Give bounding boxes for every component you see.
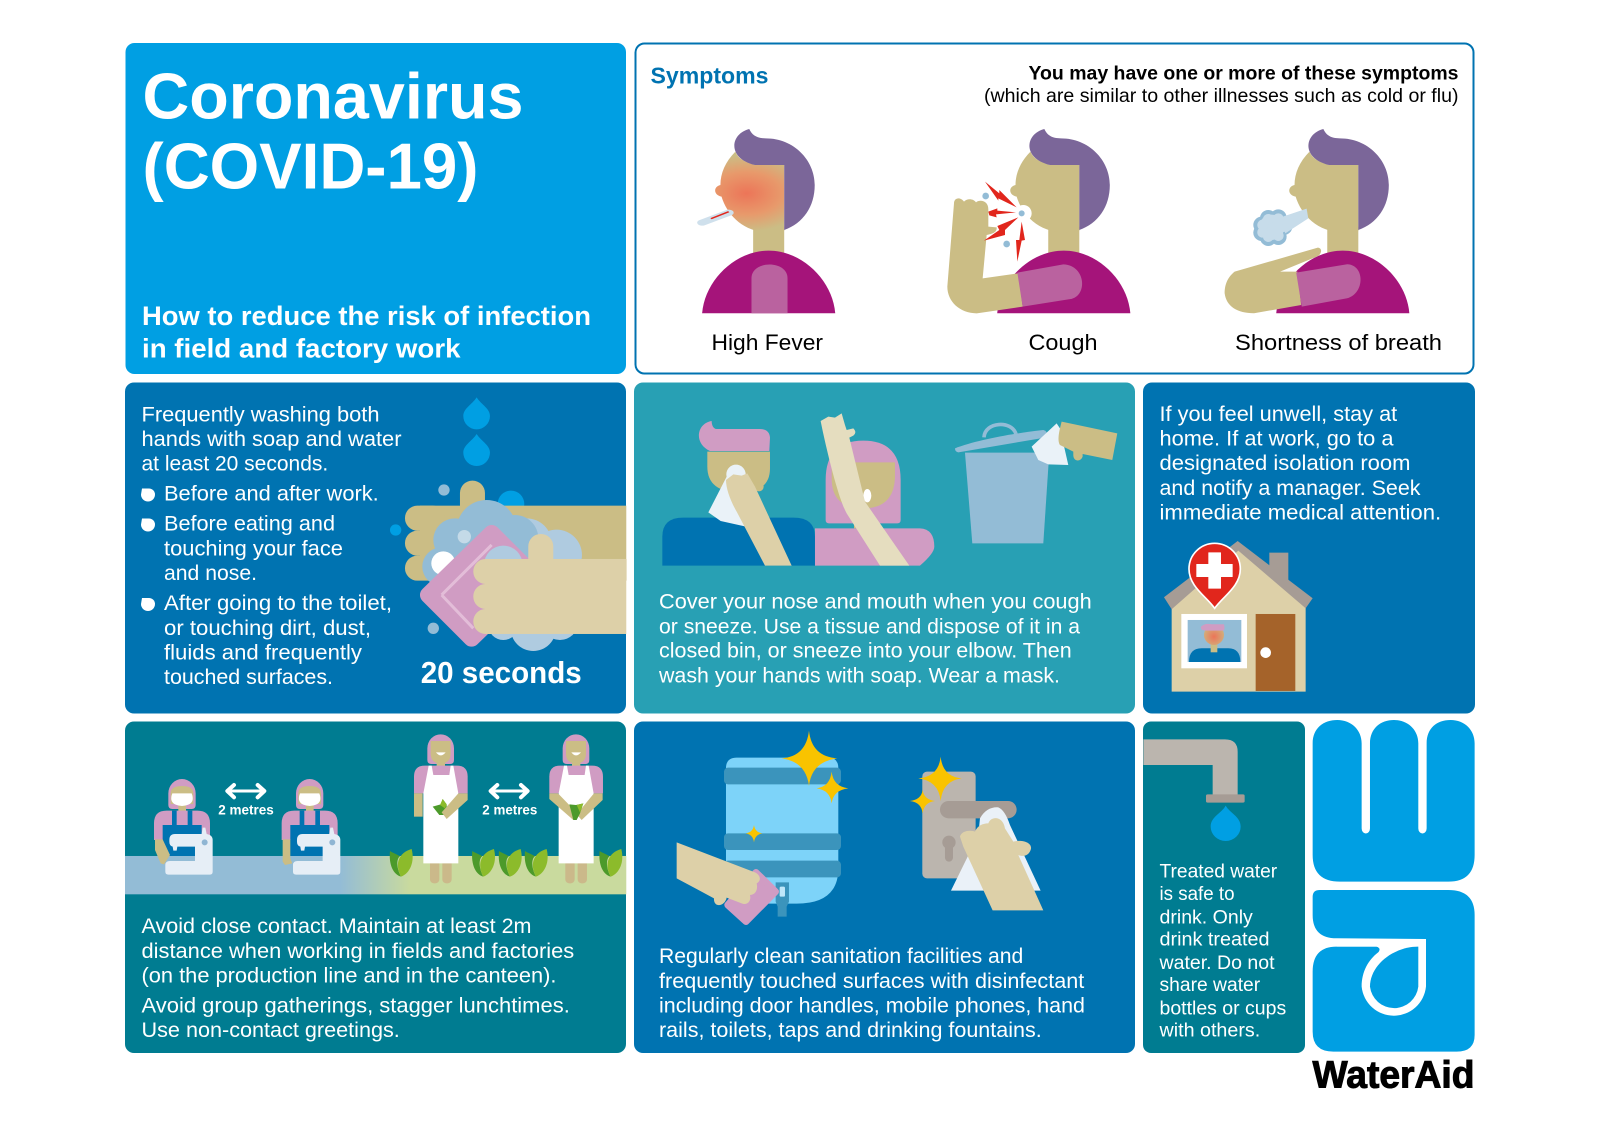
- text: treated water: drink. Only: [1160, 907, 1253, 928]
- text: avoid close contact: Use non-contact greetings.: [142, 1018, 400, 1042]
- icon: high fever figure: [702, 129, 835, 313]
- bullet list: touching your face: [164, 536, 343, 560]
- label: cough: Cough: [1028, 330, 1098, 355]
- panel: title: [126, 43, 626, 374]
- text: treated water: share water: [1160, 975, 1261, 996]
- text: avoid close contact: distance when working in fields and factories: [142, 939, 574, 963]
- label: 2 metres right: 2 metres: [482, 802, 537, 817]
- text: regularly clean: [659, 944, 1085, 1042]
- text: cover your nose: closed bin, or sneeze into your elbow. Then: [659, 639, 1072, 663]
- heading: symptoms: Symptoms: [650, 62, 768, 88]
- bullet list: touched surfaces.: [164, 665, 333, 689]
- icon: cough figure head and body: [997, 129, 1130, 313]
- bullet list: Before eating and: [164, 512, 335, 536]
- icon: door handle plate: [922, 772, 1017, 878]
- illustration: house with medical pin: [1164, 541, 1313, 692]
- bullet list: After going to the toilet,: [164, 591, 392, 615]
- icon: cloth and hand on handle: [951, 807, 1043, 910]
- icon: field worker left: [414, 734, 468, 883]
- text: treated water: [1158, 862, 1286, 1042]
- symptoms intro text: (which are similar to other illnesses such as cold or flu): [984, 85, 1458, 107]
- title: (COVID-19): [142, 130, 478, 202]
- text: if you feel unwell: home. If at work, go to a: [1160, 427, 1394, 451]
- bullet list: or touching dirt, dust,: [164, 616, 371, 640]
- subtitle: [142, 301, 591, 364]
- panel: clean surfaces: [634, 722, 1135, 1053]
- text: if you feel unwell: immediate medical attention.: [1160, 500, 1441, 524]
- icon: water cooler bottle: [724, 758, 841, 917]
- text: avoid close contact: Avoid group gatherings, stagger lunchtimes.: [142, 994, 570, 1018]
- illustration: cleaning bottle and door handle: [677, 731, 1043, 922]
- icon: breath figure head and body: [1276, 129, 1409, 313]
- text: if you feel unwell: If you feel unwell, stay at: [1160, 402, 1397, 426]
- panel: avoid close contact: [125, 722, 626, 1053]
- text: if you feel unwell: designated isolation room: [1160, 451, 1410, 475]
- icon: arrow 2 metres left: [227, 785, 264, 797]
- bullet list: Before and after work.: [164, 482, 379, 506]
- text: treated water: is safe to: [1160, 884, 1234, 905]
- icon: cough arm and sparks: [947, 182, 1082, 313]
- icon: bin with lid and tissue: [955, 422, 1117, 543]
- panel: hand washing: [125, 382, 627, 714]
- symptoms intro text: You may have one or more of these symptoms: [1028, 62, 1459, 84]
- icon: sparkles on bottle: [746, 731, 848, 842]
- subtitle: in field and factory work: [142, 334, 461, 364]
- text: avoid close contact: (on the production line and in the canteen).: [142, 964, 556, 988]
- text: treated water: drink treated: [1160, 930, 1270, 951]
- panel: treated water: [1143, 722, 1305, 1053]
- panel: stay at home: [1143, 382, 1475, 714]
- text: if you feel unwell: [1160, 402, 1441, 524]
- illustrations: symptom figures: [702, 129, 1409, 313]
- icon: woman sneezing into elbow: [815, 413, 934, 566]
- bullet list: [141, 482, 392, 689]
- panel: cover coughs and sneezes: [634, 382, 1135, 714]
- illustration: covering nose and mouth, binning tissue: [662, 413, 1117, 566]
- text: avoid close contact: [142, 914, 574, 1042]
- label: shortness of breath: Shortness of breath: [1235, 330, 1442, 355]
- title: [142, 60, 524, 202]
- symptoms intro text: [984, 62, 1459, 107]
- illustration: workers 2 metres apart: [125, 734, 626, 894]
- logo mark: [1313, 720, 1475, 1052]
- logo: WaterAid: [1312, 720, 1475, 1096]
- hand washing intro text: at least 20 seconds.: [142, 452, 328, 476]
- text: treated water: with others.: [1158, 1021, 1260, 1042]
- hand washing intro text: hands with soap and water: [142, 427, 402, 451]
- subtitle: How to reduce the risk of infection: [142, 301, 591, 331]
- illustration: hands washing with soap: [390, 397, 627, 651]
- icon: sewing worker right: [282, 779, 340, 875]
- label: 2 metres left: 2 metres: [218, 802, 274, 817]
- bullet list: and nose.: [164, 561, 257, 585]
- icon: sewing worker left: [154, 779, 213, 875]
- floor band: [125, 856, 626, 894]
- text: cover your nose: Cover your nose and mouth when you cough: [659, 589, 1092, 613]
- label: 20 seconds: 20 seconds: [421, 655, 582, 690]
- text: cover your nose: or sneeze. Use a tissue and dispose of it in a: [659, 614, 1080, 638]
- title: Coronavirus: [142, 60, 524, 132]
- icon: tap with water drop: [1143, 739, 1245, 841]
- text: regularly clean: frequently touched surfaces with disinfectant: [659, 969, 1084, 993]
- hand washing intro text: Frequently washing both: [142, 403, 380, 427]
- logo wordmark: WaterAid: [1312, 1054, 1474, 1096]
- text: regularly clean: rails, toilets, taps and drinking fountains.: [659, 1018, 1042, 1042]
- panel: symptoms: [636, 44, 1474, 374]
- icon: hand with sponge: [677, 842, 776, 922]
- bullet list: fluids and frequently: [164, 640, 362, 664]
- text: regularly clean: Regularly clean sanitation facilities and: [659, 944, 1023, 968]
- text: treated water: bottles or cups: [1160, 998, 1286, 1019]
- icon: plants: [390, 849, 622, 877]
- text: regularly clean: including door handles, mobile phones, hand: [659, 994, 1085, 1018]
- icon: field worker right: [549, 734, 603, 883]
- label: high fever: High Fever: [712, 330, 824, 355]
- icon: arrow 2 metres right: [491, 785, 528, 797]
- icon: sparkles on door: [910, 757, 962, 813]
- text: treated water: water. Do not: [1158, 953, 1275, 974]
- hand washing intro text: [142, 403, 402, 476]
- icon: breath cloud and arm: [1225, 209, 1361, 313]
- icon: man with tissue: [662, 421, 815, 566]
- text: treated water: Treated water: [1160, 862, 1278, 883]
- text: cover your nose: wash your hands with soap. Wear a mask.: [658, 664, 1060, 688]
- text: avoid close contact: Avoid close contact. Maintain at least 2m: [142, 914, 532, 938]
- text: if you feel unwell: and notify a manager. Seek: [1160, 476, 1421, 500]
- text: cover your nose: [658, 589, 1092, 688]
